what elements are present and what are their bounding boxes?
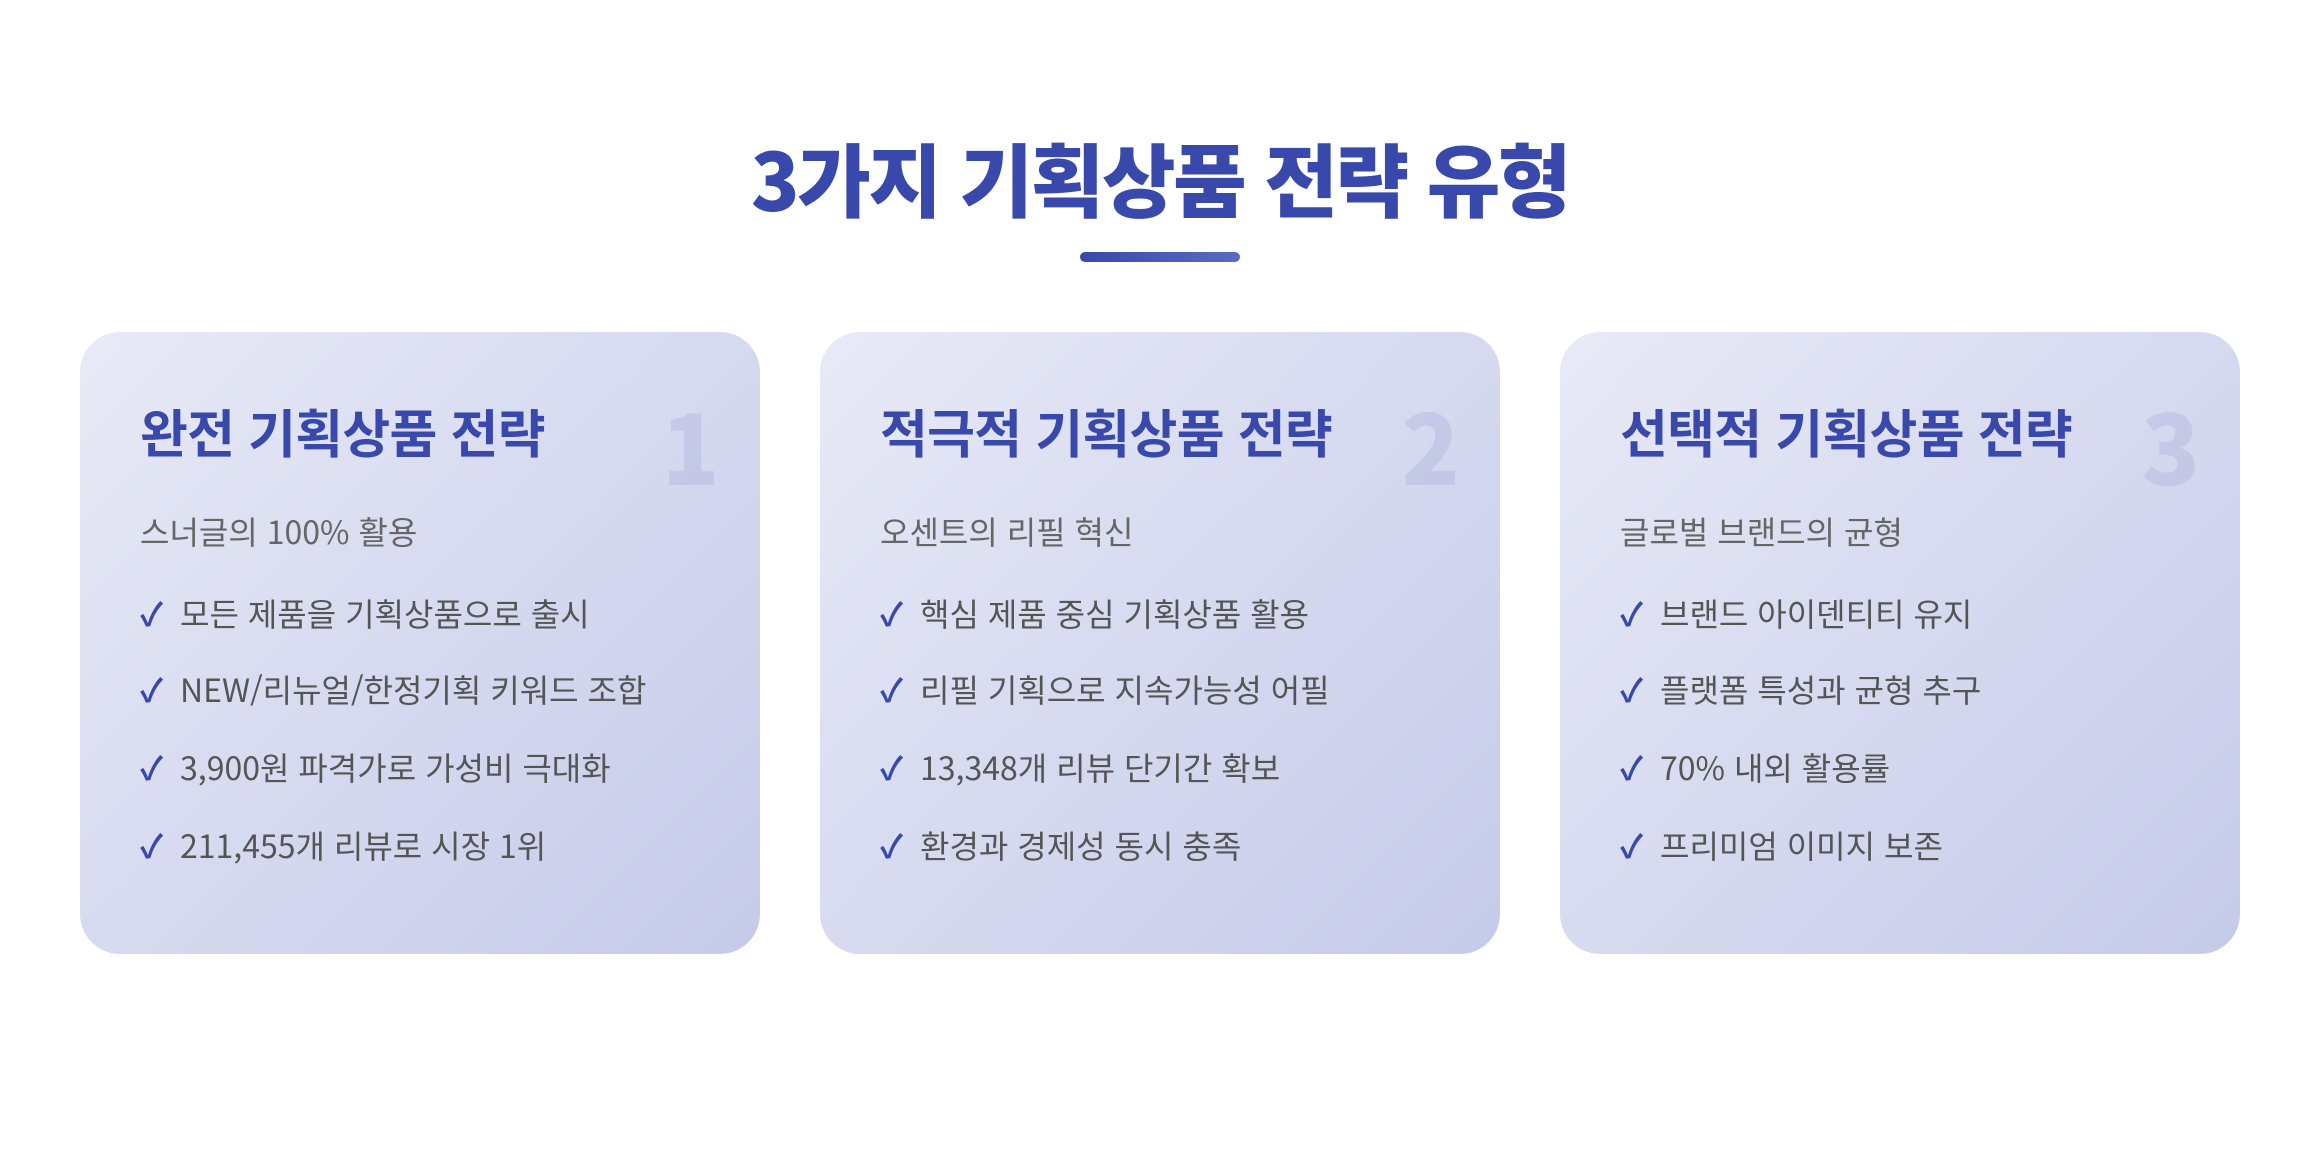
card heading: 선택적 기획상품 전략	[1620, 393, 2072, 468]
card heading: 적극적 기획상품 전략	[880, 393, 1332, 468]
list item: ✓	[1620, 590, 1643, 636]
list item: ✓	[1620, 822, 1643, 868]
list item: 211,455개 리뷰로 시장 1위	[180, 822, 546, 868]
list item: ✓	[140, 666, 163, 712]
list item: 3,900원 파격가로 가성비 극대화	[180, 744, 611, 790]
list item: NEW/리뉴얼/한정기획 키워드 조합	[180, 666, 646, 712]
list item: ✓	[1620, 666, 1643, 712]
card number: 2	[1402, 374, 1460, 513]
card subtitle: 글로벌 브랜드의 균형	[1620, 508, 1903, 554]
card subtitle: 스너글의 100% 활용	[140, 508, 417, 554]
list item: 브랜드 아이덴티티 유지	[1660, 590, 1972, 636]
list item: 리필 기획으로 지속가능성 어필	[920, 666, 1330, 712]
title: 3가지 기획상품 전략 유형	[751, 119, 1569, 235]
list item: ✓	[880, 744, 903, 790]
list item: 70% 내외 활용률	[1660, 744, 1890, 790]
list item: 프리미엄 이미지 보존	[1660, 822, 1943, 868]
list item: ✓	[140, 590, 163, 636]
list item: 환경과 경제성 동시 충족	[920, 822, 1241, 868]
card subtitle: 오센트의 리필 혁신	[880, 508, 1133, 554]
panel: strategy 3	[1560, 332, 2240, 954]
card heading: 완전 기획상품 전략	[140, 393, 545, 468]
panel: strategy 1	[80, 332, 760, 954]
list item: ✓	[140, 822, 163, 868]
list item: ✓	[880, 666, 903, 712]
list item: ✓	[140, 744, 163, 790]
title underline	[1080, 252, 1240, 262]
list item: 핵심 제품 중심 기획상품 활용	[920, 590, 1309, 636]
card number: 3	[2142, 374, 2200, 513]
card number: 1	[662, 374, 720, 513]
list item: 모든 제품을 기획상품으로 출시	[180, 590, 590, 636]
list item: ✓	[880, 822, 903, 868]
list item: 플랫폼 특성과 균형 추구	[1660, 666, 1981, 712]
list item: ✓	[1620, 744, 1643, 790]
list item: ✓	[880, 590, 903, 636]
panel: strategy 2	[820, 332, 1500, 954]
list item: 13,348개 리뷰 단기간 확보	[920, 744, 1280, 790]
